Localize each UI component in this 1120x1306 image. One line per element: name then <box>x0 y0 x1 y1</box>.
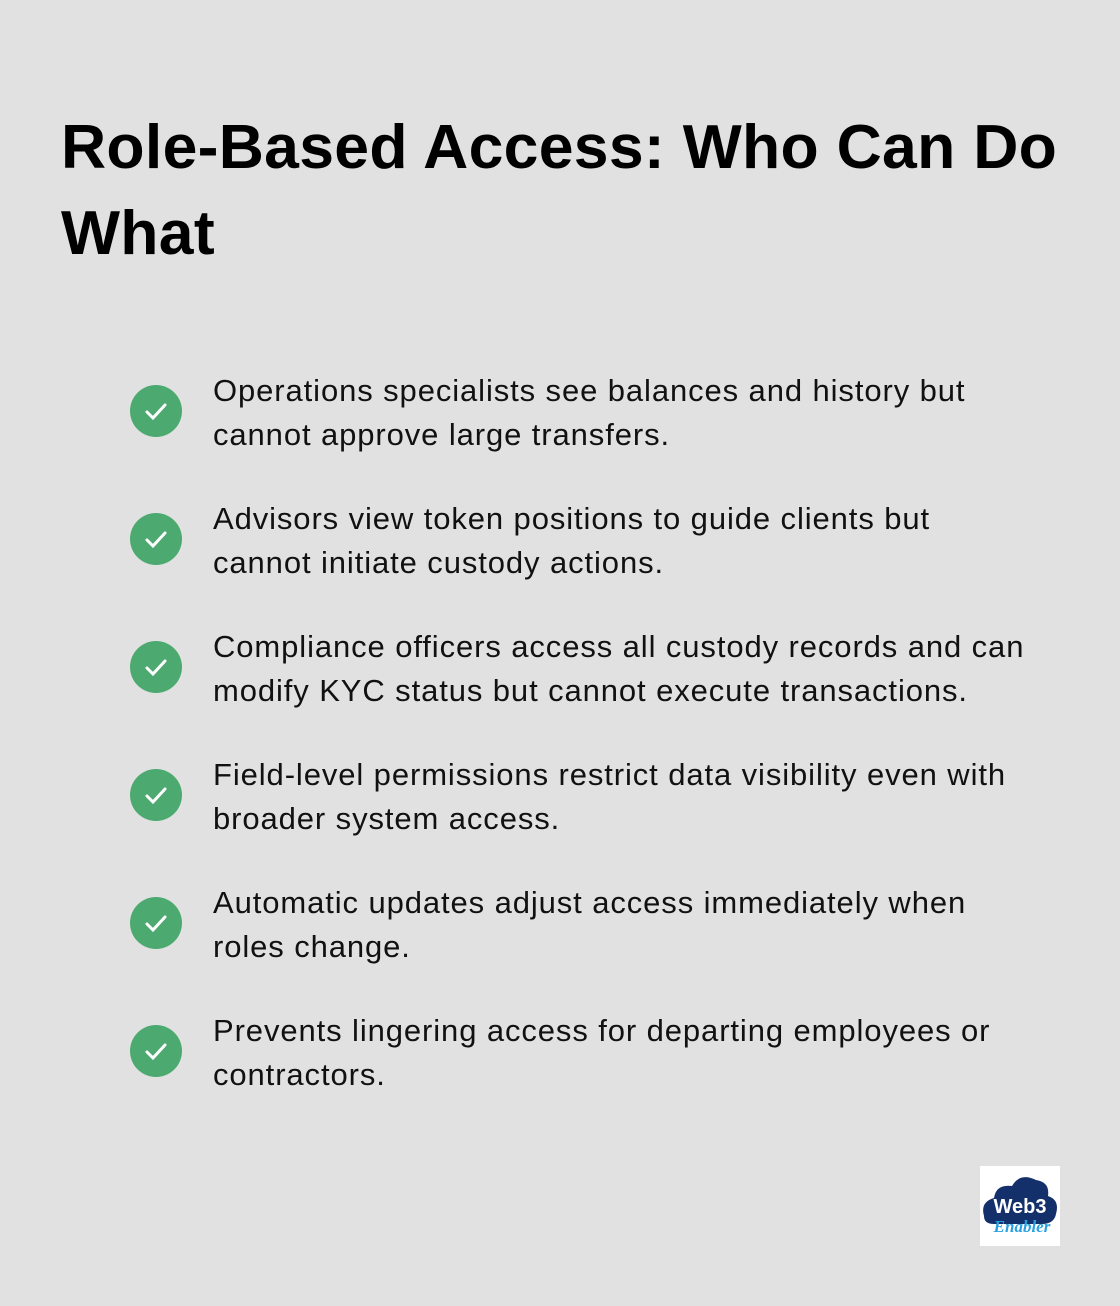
item 6 <box>130 1013 990 1092</box>
text 2 <box>213 501 930 580</box>
text 4: broader system access. <box>213 801 560 836</box>
item 5 <box>130 885 966 964</box>
text 6: contractors. <box>213 1057 386 1092</box>
icon: check 5 <box>130 897 182 949</box>
icon: check 6 <box>130 1025 182 1077</box>
item 2 <box>130 501 930 580</box>
icon: check 2 <box>130 513 182 565</box>
item 4 <box>130 757 1006 836</box>
text 5: roles change. <box>213 929 411 964</box>
text 4 <box>213 757 1006 836</box>
title: Role-Based Access: Who Can Do What <box>61 112 1057 268</box>
text 3: modify KYC status but cannot execute transactions. <box>213 673 968 708</box>
text 4: Field-level permissions restrict data visibility even with <box>213 757 1006 792</box>
item 1 <box>130 373 965 452</box>
text 5 <box>213 885 966 964</box>
text 1: Operations specialists see balances and history but <box>213 373 965 408</box>
icon: check 4 <box>130 769 182 821</box>
text 2: cannot initiate custody actions. <box>213 545 664 580</box>
text 3 <box>213 629 1024 708</box>
icon: check 3 <box>130 641 182 693</box>
item 3 <box>130 629 1024 708</box>
text 1: cannot approve large transfers. <box>213 417 670 452</box>
text 3: Compliance officers access all custody records and can <box>213 629 1024 664</box>
logo: Web3 <box>994 1196 1046 1218</box>
text 5: Automatic updates adjust access immediately when <box>213 885 966 920</box>
logo: Enabler <box>993 1217 1051 1236</box>
text 6 <box>213 1013 990 1092</box>
logo <box>980 1166 1060 1246</box>
icon: check 1 <box>130 385 182 437</box>
text 1 <box>213 373 965 452</box>
text 2: Advisors view token positions to guide clients but <box>213 501 930 536</box>
text 6: Prevents lingering access for departing employees or <box>213 1013 990 1048</box>
